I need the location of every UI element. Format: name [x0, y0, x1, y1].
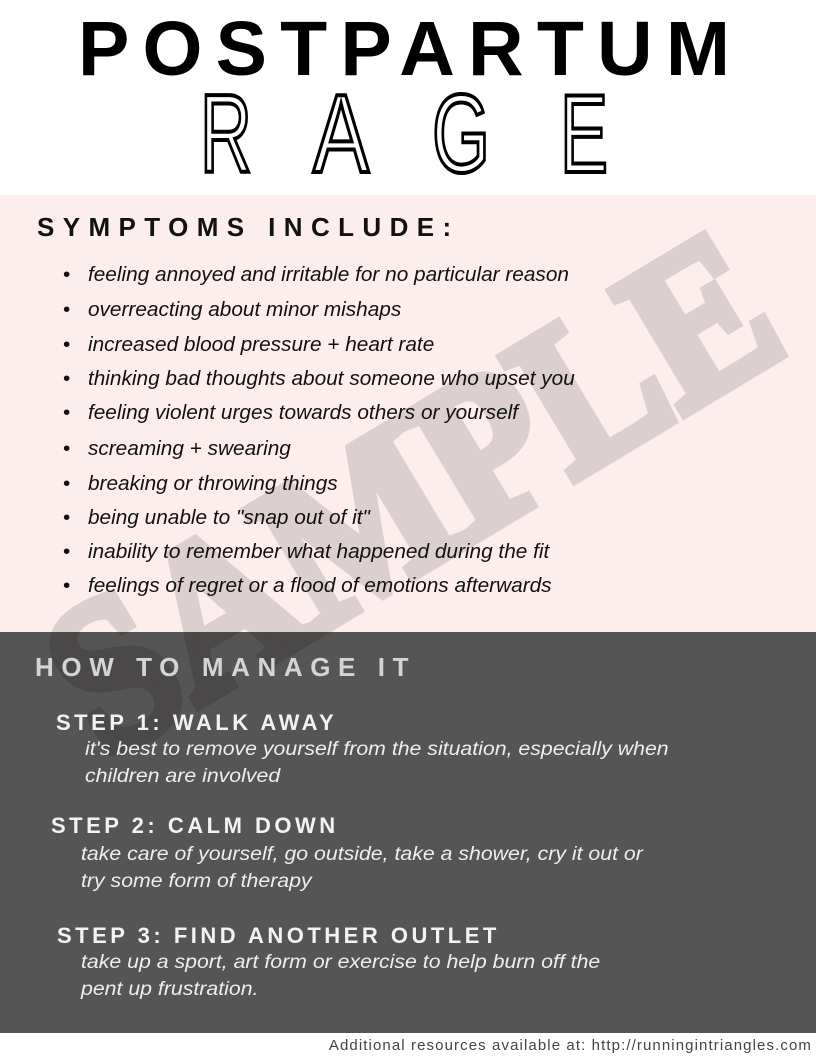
- heading: symptoms include: SYMPTOMS INCLUDE:: [37, 212, 460, 242]
- title: RAGE: E: [560, 72, 608, 195]
- step 2: STEP 2: CALM DOWN: [51, 813, 339, 838]
- heading: how to manage it: HOW TO MANAGE IT: [35, 652, 416, 682]
- title: RAGE: R: [200, 72, 252, 195]
- step 1: children are involved: [85, 766, 280, 787]
- step 1: STEP 1: WALK AWAY: [56, 710, 337, 735]
- list: symptoms: increased blood pressure + heart rate: [88, 334, 434, 356]
- step 1: it's best to remove yourself from the situation, especially when: [85, 739, 669, 760]
- list: symptoms: overreacting about minor mishaps: [88, 299, 401, 321]
- title: RAGE: A: [313, 72, 369, 195]
- list: symptoms: feelings of regret or a flood of emotions afterwards: [88, 575, 552, 597]
- panel: symptoms background: [0, 195, 816, 632]
- step 2: [51, 813, 644, 892]
- footer: Additional resources available at: http://runningintriangles.com: [329, 1037, 812, 1054]
- step 2: try some form of therapy: [81, 871, 312, 892]
- panel: manage background: [0, 632, 816, 1033]
- list: symptoms: breaking or throwing things: [88, 473, 338, 495]
- list: symptoms: screaming + swearing: [88, 438, 291, 460]
- title: POSTPARTUM RAGE: [78, 6, 730, 195]
- list: symptoms: being unable to "snap out of it": [88, 507, 370, 529]
- title: RAGE: G: [432, 72, 490, 195]
- list: symptoms: feeling violent urges towards others or yourself: [88, 402, 518, 424]
- step 1: [56, 710, 669, 787]
- step 3: STEP 3: FIND ANOTHER OUTLET: [57, 923, 500, 948]
- title: POSTPARTUM: POSTPARTUM: [78, 6, 730, 92]
- step 3: take up a sport, art form or exercise to help burn off the: [81, 952, 600, 973]
- list: symptoms: thinking bad thoughts about someone who upset you: [88, 368, 575, 390]
- step 3: [57, 923, 600, 1000]
- list: symptoms: feeling annoyed and irritable for no particular reason: [88, 264, 569, 286]
- step 3: pent up frustration.: [81, 979, 258, 1000]
- list: symptoms: inability to remember what happened during the fit: [88, 541, 549, 563]
- list: symptoms: [64, 264, 575, 597]
- step 2: take care of yourself, go outside, take a shower, cry it out or: [81, 844, 643, 865]
- title: RAGE: [200, 72, 608, 196]
